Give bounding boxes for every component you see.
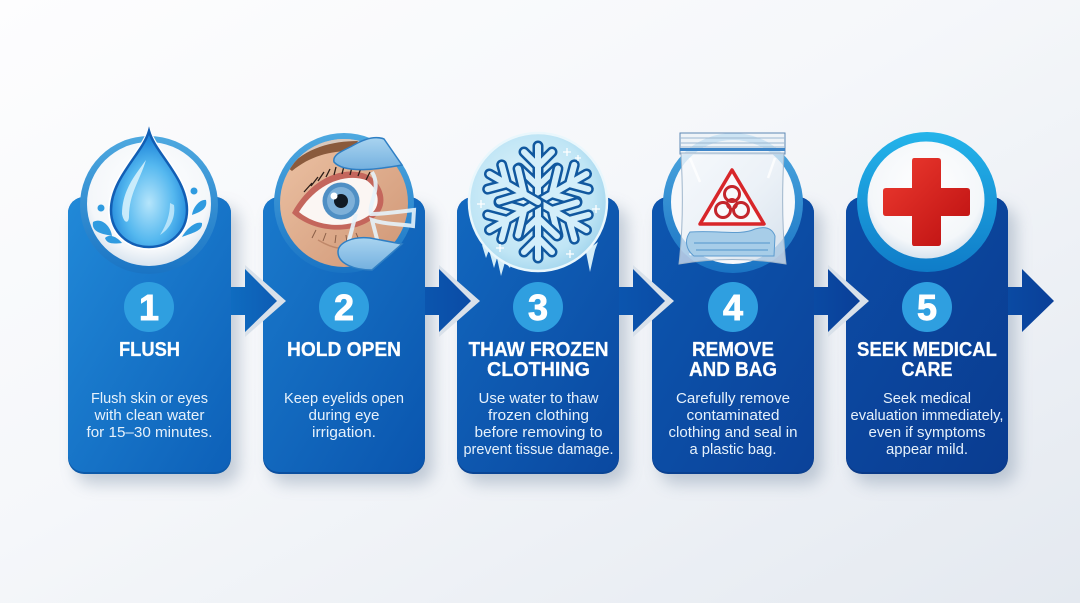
body text: seek medical care: evaluation immediately,: [850, 407, 1004, 424]
heading: thaw frozen clothing: [468, 338, 608, 381]
body text: seek medical care: [850, 390, 1004, 458]
heading: thaw frozen clothing: THAW FROZEN: [468, 338, 608, 361]
heading: seek medical care: [857, 338, 997, 381]
body text: hold open: Keep eyelids open: [284, 390, 404, 407]
heading: seek medical care: SEEK MEDICAL: [857, 338, 997, 361]
number badge 2: 2: [334, 287, 354, 328]
icon: sealed plastic bag with biohazard sign: [663, 133, 803, 273]
number badge 2: [319, 282, 369, 332]
heading: flush: FLUSH: [119, 338, 180, 361]
body text: seek medical care: Seek medical: [883, 390, 971, 407]
number badge 3: 3: [528, 287, 548, 328]
body text: remove and bag: contaminated: [686, 407, 780, 424]
arrow: step 2 to 3: [425, 265, 480, 337]
icon: snowflake in ice disc: [469, 133, 607, 276]
heading: seek medical care: CARE: [902, 358, 952, 381]
body text: thaw frozen clothing: prevent tissue damage.: [464, 441, 614, 458]
icon: eye held open with gloved fingers: [274, 133, 414, 273]
heading: remove and bag: AND BAG: [689, 358, 777, 381]
icon: red medical cross: [857, 132, 997, 272]
heading: hold open: HOLD OPEN: [287, 338, 401, 361]
step 1 panel: flush: [68, 125, 239, 484]
body text: thaw frozen clothing: Use water to thaw: [478, 390, 599, 407]
step 3 panel: thaw frozen clothing: [457, 133, 627, 484]
body text: flush: with clean water: [93, 407, 204, 424]
arrow: step 1 to 2: [231, 265, 286, 337]
arrow: step 4 to 5: [814, 265, 869, 337]
body text: hold open: irrigation.: [312, 424, 376, 441]
step 5 panel: seek medical care: [846, 132, 1016, 484]
icon: water drop: [80, 125, 218, 274]
water stream: [348, 172, 414, 244]
body text: hold open: [284, 390, 404, 441]
number badge 4: 4: [723, 287, 743, 328]
number badge 3: [513, 282, 563, 332]
biohazard warning triangle: [700, 170, 764, 224]
arrow: step 3 to 4: [619, 265, 674, 337]
body text: hold open: during eye: [308, 407, 380, 424]
body text: seek medical care: even if symptoms: [868, 424, 986, 441]
body text: thaw frozen clothing: [464, 390, 614, 458]
gloved finger bottom: [338, 238, 402, 270]
number badge 1: [124, 282, 174, 332]
body text: remove and bag: [668, 390, 798, 458]
heading: thaw frozen clothing: CLOTHING: [487, 358, 590, 381]
gloved finger top: [334, 138, 402, 170]
body text: flush: Flush skin or eyes: [91, 390, 208, 407]
arrow: step 5 onward: [1008, 269, 1054, 332]
body text: seek medical care: appear mild.: [886, 441, 968, 458]
number badge 1: 1: [139, 287, 159, 328]
body text: flush: [86, 390, 212, 441]
heading: remove and bag: REMOVE: [692, 338, 774, 361]
body text: remove and bag: clothing and seal in: [668, 424, 798, 441]
body text: remove and bag: Carefully remove: [676, 390, 790, 407]
number badge 5: 5: [917, 287, 937, 328]
body text: thaw frozen clothing: before removing to: [474, 424, 602, 441]
step 4 panel: remove and bag: [652, 133, 822, 484]
body text: thaw frozen clothing: frozen clothing: [488, 407, 589, 424]
heading: remove and bag: [689, 338, 777, 381]
body text: remove and bag: a plastic bag.: [690, 441, 776, 458]
body text: flush: for 15–30 minutes.: [86, 424, 212, 441]
step 2 panel: hold open: [263, 133, 433, 484]
number badge 4: [708, 282, 758, 332]
number badge 5: [902, 282, 952, 332]
